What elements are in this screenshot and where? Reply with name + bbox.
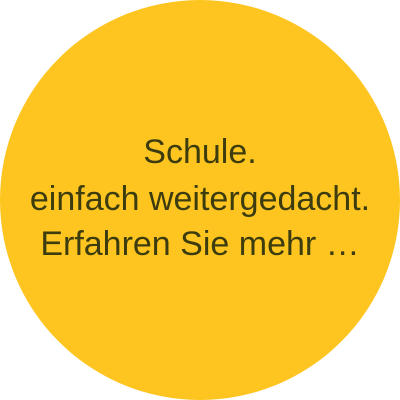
text block: slogan [30,133,370,263]
text block: slogan: einfach weitergedacht. [30,180,370,218]
text block: slogan: Erfahren Sie mehr … [40,225,360,263]
text block: slogan: Schule. [143,133,257,171]
